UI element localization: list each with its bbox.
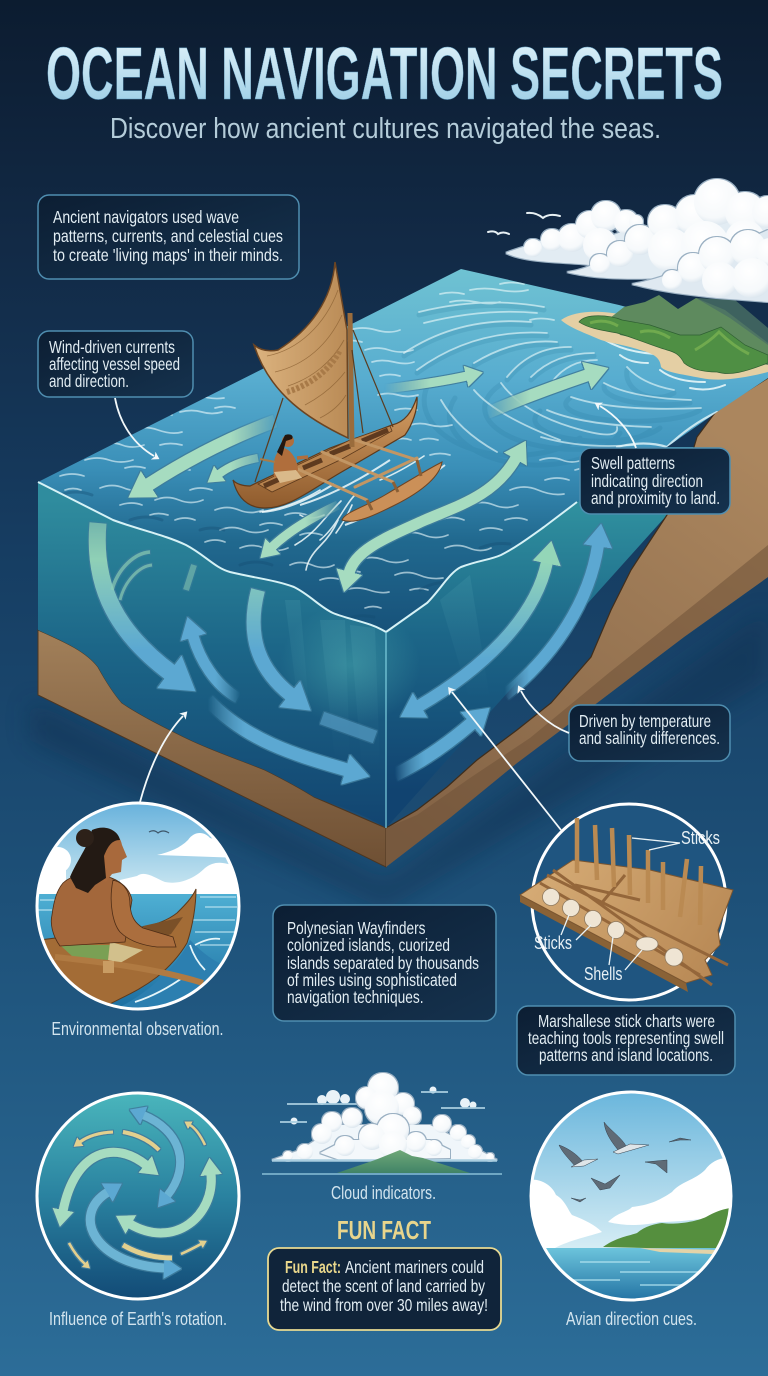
rods: [540, 870, 728, 985]
hair: [70, 828, 120, 893]
rigging: [352, 330, 393, 433]
label sticks top: Sticks: [681, 828, 720, 848]
boom struts: [367, 460, 421, 510]
callout: polynesian wayfinders: [273, 905, 496, 1021]
horizon: [262, 1173, 502, 1175]
arm: [111, 880, 176, 947]
subtitle: Discover how ancient cultures navigated the seas.: [110, 113, 661, 145]
sky clouds: [30, 833, 240, 894]
canoe with sail: [233, 262, 445, 525]
wood platform: [520, 860, 733, 983]
callout: swell patterns: Swell patterns: [591, 453, 675, 473]
deck: [258, 426, 392, 492]
torso: [51, 874, 132, 946]
callout: wind-driven currents: and direction.: [49, 371, 129, 391]
head: [104, 838, 127, 878]
callout: polynesian wayfinders: islands separated by thousands: [287, 953, 479, 973]
front cloud: [320, 1114, 450, 1160]
deck slats: [264, 430, 388, 486]
callout: wind-driven currents: [38, 331, 193, 397]
mast: [350, 313, 352, 447]
cloud back right: [567, 179, 768, 280]
cloud base: [272, 1159, 497, 1162]
hull: [233, 397, 417, 508]
sail: [254, 262, 348, 438]
label: cloud indicators: Cloud indicators.: [331, 1182, 436, 1203]
rotation arrows: [63, 1115, 211, 1268]
callout: living maps: Ancient navigators used wave: [53, 207, 239, 227]
island: [603, 1208, 735, 1250]
island: [561, 295, 768, 380]
sky: [57, 804, 229, 883]
circle: environmental observation: [30, 800, 245, 1014]
wake: [262, 460, 445, 525]
hair bun: [76, 829, 94, 847]
corner glow: [280, 605, 420, 725]
foliage: [579, 316, 768, 374]
light rays: [285, 575, 490, 770]
rope left: [255, 398, 283, 482]
left water face: [38, 482, 386, 828]
beam: [55, 957, 203, 983]
label: avian direction: Avian direction cues.: [566, 1308, 697, 1329]
bird: [149, 831, 169, 833]
circle: earth's rotation: [37, 1093, 239, 1299]
callout: living maps: to create 'living maps' in their minds.: [53, 245, 283, 265]
label shells: Shells: [584, 964, 622, 984]
sticks: [577, 818, 701, 925]
sail seams: [267, 290, 346, 418]
callout: thermohaline: Driven by temperature: [579, 711, 711, 731]
pointer arrows: [115, 398, 636, 830]
callout: living maps: patterns, currents, and celestial cues: [53, 226, 283, 246]
block shadow: [30, 610, 768, 910]
splash: [122, 940, 220, 1008]
callout: thermohaline: [569, 705, 730, 761]
outrigger float: [342, 462, 442, 521]
wood side: [520, 895, 688, 992]
callout: fun fact: Fun Fact:: [285, 1257, 341, 1277]
canoe: [40, 889, 196, 1004]
callout: fun fact: [268, 1248, 501, 1330]
circle: stick chart: [520, 804, 733, 1000]
cloud front: [632, 230, 768, 302]
cloud back left: [506, 201, 643, 268]
label: earth's rotation: Influence of Earth's rotation.: [49, 1308, 227, 1329]
clouds: [506, 179, 768, 302]
callout: polynesian wayfinders: colonized islands, cuorized: [287, 935, 450, 955]
label: environmental observation: Environmental observation.: [52, 1018, 224, 1039]
callout: polynesian wayfinders: navigation techniques.: [287, 987, 424, 1007]
callout: wind-driven currents: Wind-driven currents: [49, 337, 175, 357]
sea surface: [38, 269, 768, 632]
surface currents: [148, 375, 588, 573]
circle: avian direction: [525, 1088, 740, 1306]
callout: swell patterns: and proximity to land.: [591, 488, 720, 508]
mountains: [610, 295, 768, 365]
callout: marshallese stick charts: patterns and island locations.: [539, 1045, 713, 1065]
callout: polynesian wayfinders: Polynesian Wayfinders: [287, 918, 426, 938]
navigator: [260, 434, 308, 483]
deep currents right: [395, 545, 598, 775]
shells: [542, 888, 683, 966]
clouds: [525, 1158, 735, 1250]
callout: swell patterns: [580, 448, 730, 514]
back cloud mass: [272, 1073, 497, 1161]
fun fact heading: FUN FACT: [337, 1215, 431, 1245]
callout: thermohaline: and salinity differences.: [579, 728, 720, 748]
callout: wind-driven currents: affecting vessel speed: [49, 354, 180, 374]
callout: fun fact: the wind from over 30 miles away!: [280, 1295, 488, 1315]
hazy peak: [696, 298, 768, 345]
callout: marshallese stick charts: Marshallese stick charts were: [538, 1011, 715, 1031]
land shade band: [386, 545, 768, 867]
sail pattern band: [287, 350, 340, 392]
sky: [534, 1094, 723, 1248]
label sticks bottom: Sticks: [534, 933, 572, 953]
callout: fun fact: Ancient mariners could: [345, 1257, 484, 1277]
callout: swell patterns: indicating direction: [591, 471, 703, 491]
outrigger booms: [293, 440, 417, 500]
callout: polynesian wayfinders: of miles using sophisticated: [287, 970, 457, 990]
icon: cumulus clouds over island: [262, 1073, 502, 1174]
waterline edge: [38, 482, 577, 632]
wave highlights: [38, 897, 237, 945]
birds: [559, 1122, 691, 1202]
wrap green: [60, 945, 110, 960]
callout: marshallese stick charts: [517, 1006, 735, 1075]
canoe inside: [143, 917, 183, 935]
seabed left: [38, 630, 386, 867]
callout: living maps: [38, 195, 299, 279]
surface waves: [60, 282, 725, 618]
sea: [546, 1248, 716, 1298]
leader lines: [561, 838, 680, 970]
land edge line: [386, 378, 768, 828]
corner edge: [385, 632, 387, 828]
deep currents left: [97, 523, 375, 770]
callout: fun fact: detect the scent of land carried by: [282, 1276, 485, 1296]
skirt: [108, 942, 143, 963]
island: [337, 1150, 470, 1173]
sea: [38, 894, 238, 1006]
right water face: [386, 447, 700, 828]
icon: birds in sky: [488, 213, 560, 234]
land slope right: [386, 378, 768, 867]
island highlights: [590, 321, 749, 354]
small clouds: [290, 1086, 476, 1124]
ocean cross-section block: [30, 179, 768, 910]
rope wrap: [103, 961, 114, 973]
beach: [561, 312, 768, 380]
